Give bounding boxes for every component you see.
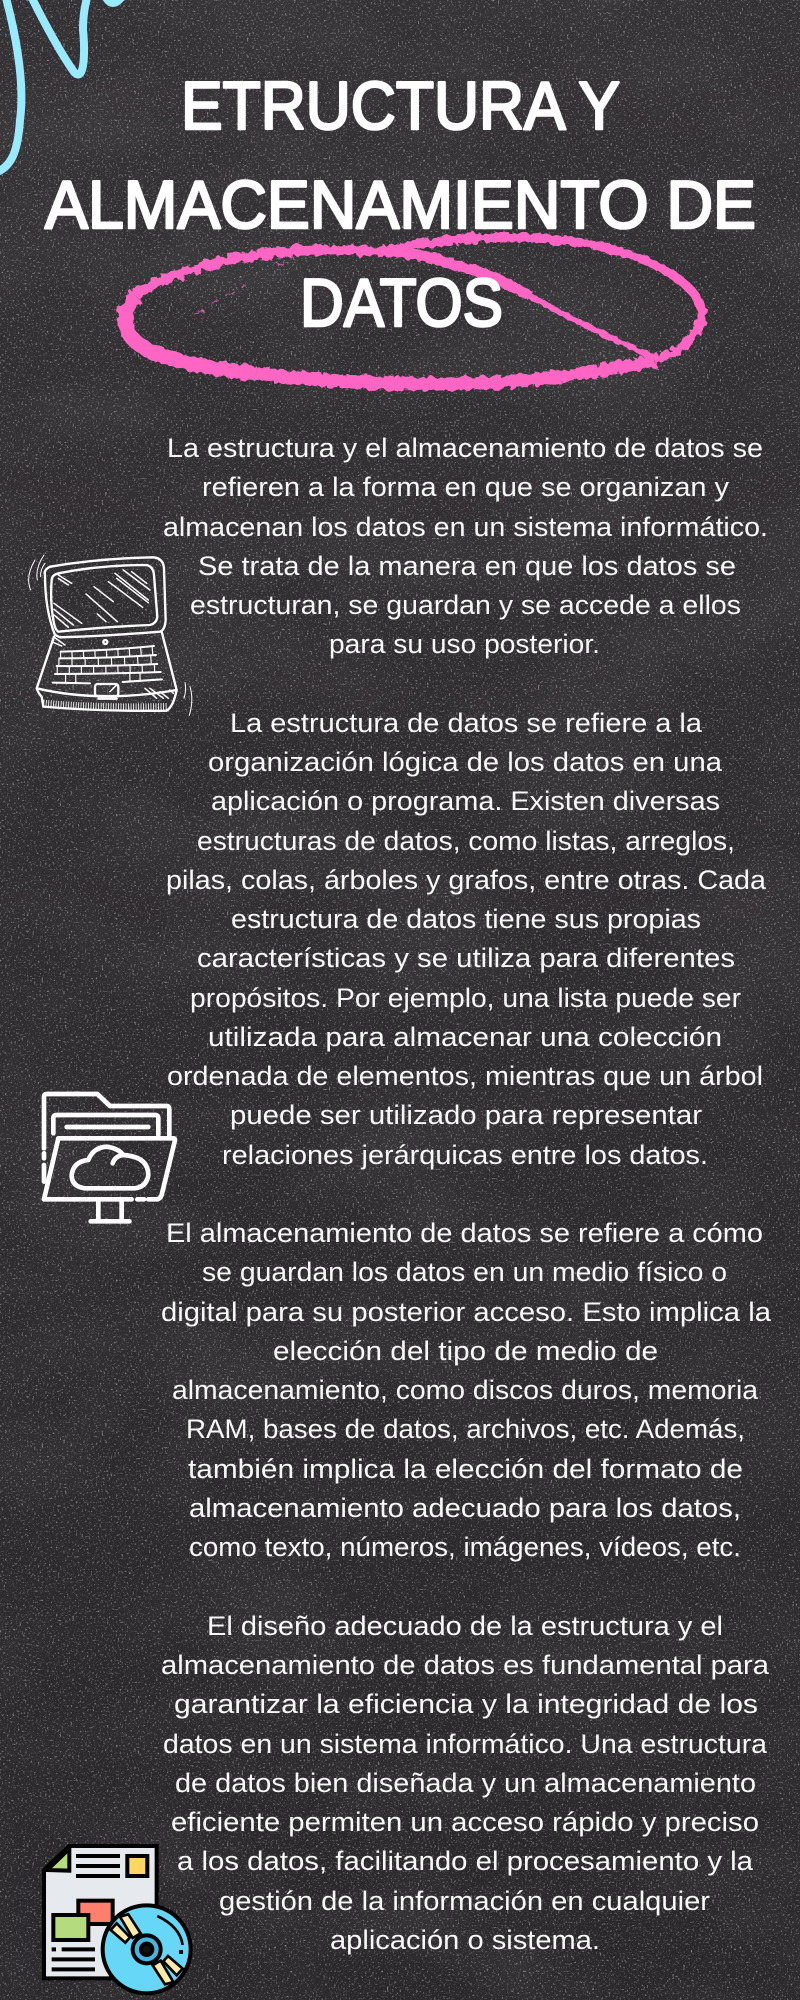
text block: data structures: puede ser utilizado para representar xyxy=(230,1100,702,1130)
text block: data structures: organización lógica de los datos en una xyxy=(208,747,723,777)
title xyxy=(45,68,756,341)
text block: data structures: aplicación o programa. Existen diversas xyxy=(211,786,720,816)
text block: design conclusion: datos en un sistema informático. Una estructura xyxy=(163,1729,768,1759)
text block: data structures: características y se utiliza para diferentes xyxy=(197,943,735,973)
text block: data structures: estructuras de datos, como listas, arreglos, xyxy=(197,826,735,856)
text block: data storage: también implica la elección del formato de xyxy=(188,1454,743,1484)
title: ALMACENAMIENTO DE xyxy=(45,167,756,243)
text block: data storage: digital para su posterior acceso. Esto implica la xyxy=(161,1297,772,1327)
text block: data storage: almacenamiento, como discos duros, memoria xyxy=(172,1375,759,1405)
text block: data storage: como texto, números, imágenes, vídeos, etc. xyxy=(189,1532,741,1562)
text block: data structures: La estructura de datos se refiere a la xyxy=(230,708,703,738)
text block: data storage: elección del tipo de medio de xyxy=(273,1336,658,1366)
title: ETRUCTURA Y xyxy=(181,68,620,144)
icon: folder with cloud and monitor stand xyxy=(44,1094,175,1221)
text block: introduction: refieren a la forma en que se organizan y xyxy=(202,472,730,502)
decoration: blue chalk squiggle xyxy=(0,0,124,172)
text block: design conclusion: gestión de la información en cualquier xyxy=(219,1886,710,1916)
text block: data storage: El almacenamiento de datos se refiere a cómo xyxy=(166,1218,763,1248)
text block: design conclusion: a los datos, facilitando el procesamiento y la xyxy=(177,1846,754,1876)
text block: data structures: propósitos. Por ejemplo, una lista puede ser xyxy=(190,983,741,1013)
text block: introduction: para su uso posterior. xyxy=(329,629,600,659)
text block: introduction: estructuran, se guardan y se accede a ellos xyxy=(190,590,741,620)
text block: design conclusion: eficiente permiten un acceso rápido y preciso xyxy=(171,1807,759,1837)
text block: introduction xyxy=(163,433,768,659)
text block: design conclusion: garantizar la eficiencia y la integridad de los xyxy=(174,1689,758,1719)
text block: introduction: almacenan los datos en un sistema informático. xyxy=(163,512,768,542)
text block: introduction: La estructura y el almacenamiento de datos se xyxy=(167,433,763,463)
text block: data storage: almacenamiento adecuado para los datos, xyxy=(189,1493,741,1523)
text block: data structures: pilas, colas, árboles y grafos, entre otras. Cada xyxy=(166,865,767,895)
text block: data structures: estructura de datos tiene sus propias xyxy=(231,904,701,934)
text block: introduction: Se trata de la manera en que los datos se xyxy=(198,551,736,581)
text block: data structures: utilizada para almacenar una colección xyxy=(208,1022,722,1052)
text block: data storage xyxy=(161,1218,772,1562)
text block: design conclusion: aplicación o sistema. xyxy=(330,1925,600,1955)
decoration: pink chalk scribble ellipse xyxy=(124,238,702,384)
text block: data structures xyxy=(166,708,767,1170)
text block: design conclusion: almacenamiento de datos es fundamental para xyxy=(161,1650,770,1680)
icon: hand drawn laptop xyxy=(29,555,192,715)
text block: design conclusion: El diseño adecuado de la estructura y el xyxy=(207,1611,723,1641)
text block: data storage: RAM, bases de datos, archivos, etc. Además, xyxy=(186,1414,745,1444)
text block: data structures: relaciones jerárquicas entre los datos. xyxy=(222,1140,708,1170)
text block: data structures: ordenada de elementos, mientras que un árbol xyxy=(167,1061,763,1091)
title: DATOS xyxy=(300,265,503,341)
text block: design conclusion: de datos bien diseñada y un almacenamiento xyxy=(175,1768,756,1798)
text block: design conclusion xyxy=(161,1611,770,1955)
text block: data storage: se guardan los datos en un medio físico o xyxy=(202,1257,727,1287)
icon: document and compact disc xyxy=(44,1846,191,1993)
